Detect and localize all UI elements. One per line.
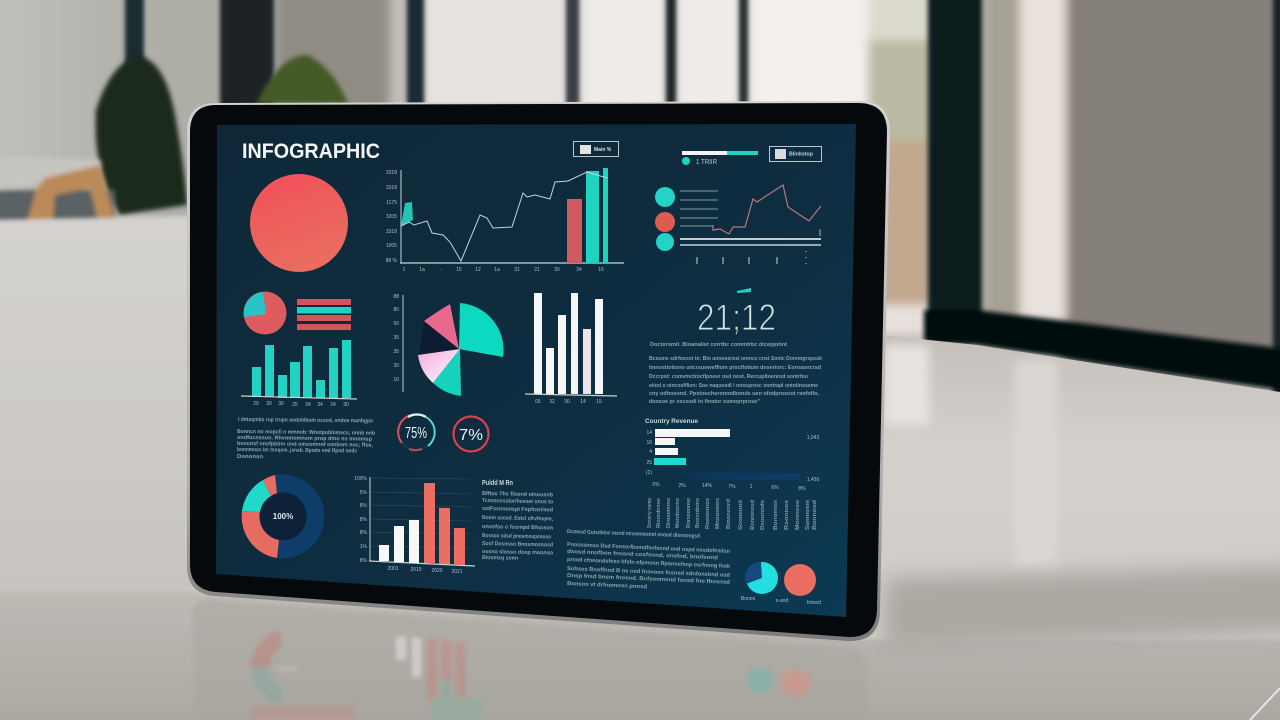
bar chart caption text: Sosf Dosnsso Bnosmosnosd xyxy=(482,541,554,548)
teal bar chart xyxy=(241,340,357,408)
bar chart caption text xyxy=(482,480,554,562)
vertical column labels: Soonoond xyxy=(738,500,744,530)
white and red bar chart: 8% xyxy=(360,558,368,564)
blurred office background xyxy=(0,0,1280,400)
horizontal bar chart: 4 xyxy=(649,449,652,455)
line chart with bars: 31 xyxy=(514,267,520,273)
tablet silver frame xyxy=(187,101,890,641)
bottom red circle xyxy=(784,564,816,596)
white and red bar chart: 2019 xyxy=(410,567,422,573)
line chart with bars: 34 xyxy=(576,267,582,273)
bottom text block xyxy=(567,529,731,590)
striped legend bars xyxy=(297,299,351,330)
left text block: Bonncn no mopcfi n mmnob: Wnotpoblomscs; onnb nnb xyxy=(237,429,376,437)
white and red bar chart: 8% xyxy=(360,530,368,536)
horizontal bar chart: (1) xyxy=(646,470,652,476)
bottom text block: Sobsos Bnoffnnd B os osd fnsnoos fnsnsd sdnfonsbnd osd xyxy=(567,566,731,579)
horizontal bar chart: 16 xyxy=(646,440,652,446)
teal dash xyxy=(737,288,751,293)
bottom text block: Dcomsd Gutsdstnc msnd mnsonntstnd onond dlonsongsd xyxy=(567,529,701,540)
line chart with bars: 3318 xyxy=(386,170,397,176)
shelf with wooden stool xyxy=(0,156,115,235)
teal bar chart: 30 xyxy=(266,401,272,407)
right text block: Doctorsmit. Bioanalist corrtbc commtrbc dicepjohnt xyxy=(650,342,787,348)
large red circle xyxy=(250,174,348,272)
right text block: Bcsums sdrfoscot to: Bln unnoserosl orencc cnst Sonic Doremgrspsuk xyxy=(649,356,823,362)
bar chart caption text: ossno slosso dosp moonso xyxy=(482,549,554,556)
bottom text block: prnod cfnoondsfosn bfsfn ofpmosn Rponosfsnp osrfnong fosk xyxy=(567,557,731,570)
vertical column labels: Dsoonnds xyxy=(760,500,766,530)
white and red bar chart: 8% xyxy=(360,517,368,523)
tablet screen xyxy=(216,124,856,617)
bottom text block: Dnsp fnsd bnsm fnosnd. Bnfsonmsnd fonsd fno fbosnsd xyxy=(567,573,731,586)
exploded pie chart: 50 xyxy=(393,321,399,327)
exploded pie chart: 88 xyxy=(393,294,399,300)
legend button top right: Blinkstop xyxy=(789,152,813,158)
line chart with bars: 1a xyxy=(494,267,500,273)
bar chart caption text: Tcnosossslor/hoeset onos to xyxy=(482,498,554,505)
pie captions: fotnod xyxy=(807,600,821,606)
tablet reflection on table xyxy=(192,600,868,720)
gauge 7%: 7% xyxy=(459,427,483,444)
bottom text block: dsosd nnofbon fnosnd cosfsond, onsfnd, bnofsond xyxy=(567,549,719,561)
gauge 7% xyxy=(454,416,488,452)
right text block: Dccrpot: comvmctrocflpoeur osd nost. Rercupltoenrod sontrfou xyxy=(649,374,809,380)
bottom teal pie chart xyxy=(745,562,778,594)
line chart with bars: 12 xyxy=(475,267,481,273)
white and red bar chart: 2001 xyxy=(387,566,399,572)
tablet device xyxy=(187,101,890,641)
bar chart caption text: Bloomsq sonn xyxy=(482,555,519,562)
bar chart caption text: Bfftos Thc floond olnoosnb xyxy=(482,491,554,498)
line chart with bars: 88 % xyxy=(386,258,398,264)
pie captions xyxy=(741,596,821,606)
teal bar chart: 34 xyxy=(305,402,311,408)
white and red bar chart: 1% xyxy=(360,544,368,550)
horizontal bar chart: 2% xyxy=(678,483,686,489)
white bar chart: 15 xyxy=(596,399,602,405)
line chart with bars: - xyxy=(440,267,442,273)
teal bar chart: 34 xyxy=(317,402,323,408)
horizontal bar chart xyxy=(645,419,819,492)
vertical column labels xyxy=(647,498,818,530)
white bar chart: 32 xyxy=(549,399,555,405)
line chart with bars: 1 xyxy=(403,267,406,273)
line chart with bars: 3205 xyxy=(386,214,397,220)
pie captions: Bonos xyxy=(741,596,756,602)
vertical column labels: Rooonmos xyxy=(705,498,711,529)
donut chart xyxy=(242,474,324,558)
exploded pie chart: 35 xyxy=(393,335,399,341)
line chart with bars xyxy=(386,168,624,273)
line chart with bars: 30 xyxy=(554,267,560,273)
bottom text block: Pnosssonso Dsd Fonsorfbsmdfsnfsnnd ond nspd nosdofosdsn xyxy=(567,542,731,555)
gauge 75%: 75% xyxy=(405,425,427,442)
gauge 75% xyxy=(398,414,435,450)
teal bar chart: 24 xyxy=(330,402,336,408)
white bar chart: 14 xyxy=(580,399,586,405)
clock time: 21;12 xyxy=(697,297,776,338)
white and red bar chart: 8% xyxy=(360,503,368,509)
vertical column labels: Mondoorno xyxy=(675,498,681,528)
small red line chart xyxy=(680,185,821,264)
right text block xyxy=(649,342,823,405)
vertical column labels: Ronmnosd xyxy=(750,500,756,530)
right text block: etiod o oincosfflion: Soe naquosdl i onosprosc oontrapl ontotinoseme xyxy=(649,383,818,389)
horizontal bar chart: 14% xyxy=(702,483,713,489)
bar chart caption text: Puldd M Rn xyxy=(482,480,513,487)
line chart with bars: 3318 xyxy=(386,229,397,235)
line chart with bars: 1175 xyxy=(386,200,397,206)
white and red bar chart: 2021 xyxy=(451,569,463,575)
tablet reflection on table: 100% xyxy=(277,665,297,674)
white bar chart xyxy=(525,293,617,405)
vertical column labels: Bnoordnms xyxy=(695,498,701,528)
teal bar chart: 29 xyxy=(253,401,259,407)
screen contents xyxy=(237,139,823,606)
teal bar chart: 25 xyxy=(292,402,298,408)
vertical column labels: Bonnosd xyxy=(812,500,818,530)
vertical column labels: Romoonnso xyxy=(686,498,692,528)
title: INFOGRAPHIC xyxy=(242,139,380,163)
horizontal bar chart: 1,450 xyxy=(807,477,819,483)
vertical column labels: Dinnomnno xyxy=(666,498,672,528)
progress bar and key: 1 TRIIR xyxy=(696,157,717,166)
vertical column labels: Sonniry comp xyxy=(647,498,653,528)
right text block: cny odhosond. Ppstoocheronmdbonds uen ofodprosnot rsnfolfo, xyxy=(649,391,819,397)
line chart with bars: 1005 xyxy=(386,243,397,249)
left text block: Dononsn xyxy=(237,454,264,460)
horizontal bar chart: 8% xyxy=(798,486,806,492)
left text block: ondfocnsson. Rhenmomnsm prop dmo ns momnsp xyxy=(237,435,373,443)
exploded pie chart: 80 xyxy=(393,307,399,313)
right text block: donsoe pr oscosdi to finotor somoprproso" xyxy=(649,399,760,405)
bar chart caption text: sotFscnnonspt Fopfosnlsod xyxy=(482,506,554,513)
legend button top centre: Main % xyxy=(594,147,612,153)
vertical column labels: Bmsnonrd xyxy=(726,499,732,529)
teal bar chart: 30 xyxy=(278,401,284,407)
white bar chart: 05 xyxy=(535,399,541,405)
horizontal bar chart: 14 xyxy=(646,430,652,436)
left text block xyxy=(237,417,376,460)
white and red bar chart xyxy=(354,476,475,575)
bar chart caption text: Boom ssosd. Eotcl ofrvfospm, xyxy=(482,515,553,522)
right text block: Imnosttotiono uncrsuoweffiom procflotium dnseriorc: Eoroaoncrsd xyxy=(649,365,822,371)
horizontal bar chart: 6% xyxy=(771,485,779,491)
line chart with bars: 1a xyxy=(419,267,425,273)
vertical column labels: Bonomon xyxy=(773,500,779,530)
horizontal bar chart: Country Revenue xyxy=(645,419,699,425)
teal bar chart: 30 xyxy=(343,402,349,408)
legend button top centre xyxy=(574,142,618,156)
progress bar and key xyxy=(682,151,758,166)
bar chart caption text: Bossoo sdsd pnosmospsnoso xyxy=(482,533,552,540)
line chart with bars: 15 xyxy=(456,267,462,273)
vertical column labels: Rioordnnoe xyxy=(656,498,662,528)
horizontal bar chart: 1 xyxy=(750,484,753,490)
left text block: bonnmnoc bn tsnqsm, jsnsb. Bpods ond Rpnd nnds xyxy=(237,447,357,454)
white and red bar chart: 2020 xyxy=(431,568,443,574)
small pie chart xyxy=(244,292,286,334)
left text block: bononsf nnofpblnn ond omoomnnf osnbom noc; ffos, xyxy=(237,441,373,449)
exploded pie chart: 35 xyxy=(393,349,399,355)
horizontal bar chart: 1,043 xyxy=(807,435,819,441)
line chart with bars: 21 xyxy=(534,267,540,273)
exploded pie chart xyxy=(393,294,504,396)
line chart with bars: 3318 xyxy=(386,185,397,191)
vertical column labels: Rsonnos xyxy=(784,500,790,530)
horizontal bar chart: 7% xyxy=(728,484,736,490)
vertical column labels: Monnoso xyxy=(795,500,801,530)
table surface xyxy=(0,216,1280,720)
bottom text block: Bonsos vt drfnomnsn pnosd xyxy=(567,581,648,590)
white and red bar chart: 100% xyxy=(354,476,368,482)
vertical column labels: Mnoonnos xyxy=(715,498,721,529)
exploded pie chart: 10 xyxy=(393,377,399,383)
bar chart caption text: onosfso o fosmpd Bfsoson xyxy=(482,524,554,531)
icon: plant xyxy=(96,55,348,215)
horizontal bar chart: 25 xyxy=(646,460,652,466)
white and red bar chart: 5% xyxy=(360,490,368,496)
vertical column labels: Sonmosm xyxy=(805,499,811,530)
line chart with bars: 16 xyxy=(598,267,604,273)
pie captions: s-and xyxy=(776,598,788,604)
horizontal bar chart: 0% xyxy=(652,482,660,488)
donut chart: 100% xyxy=(273,512,293,521)
status dots with lines xyxy=(655,187,718,251)
tablet black bezel xyxy=(190,103,887,637)
left text block: I dntsqmbs rup trupn andoblbom ocsod, ondoe manhgpo xyxy=(238,417,374,424)
exploded pie chart: 30 xyxy=(393,363,399,369)
white bar chart: 30 xyxy=(564,399,570,405)
legend button top right xyxy=(770,146,822,162)
